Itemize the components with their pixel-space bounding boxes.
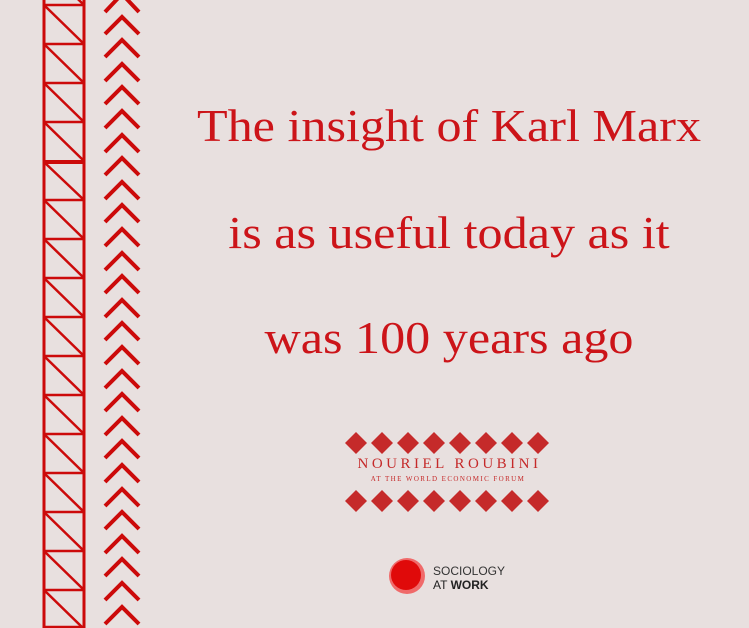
icon: red circle: [389, 558, 425, 594]
ladder: [44, 0, 84, 628]
logo: Sociology at Work: AT WORK: [433, 578, 489, 592]
logo: Sociology at Work: [389, 558, 505, 594]
quote text: was 100 years ago: [265, 312, 633, 363]
chevrons: [105, 0, 139, 624]
attribution block: [345, 432, 549, 512]
attribution block: AT THE WORLD ECONOMIC FORUM: [371, 475, 525, 483]
attribution block: NOURIEL ROUBINI: [357, 456, 542, 472]
quote text: is as useful today as it: [228, 207, 670, 258]
logo: Sociology at Work: SOCIOLOGY: [433, 564, 505, 578]
quote text: The insight of Karl Marx: [197, 100, 701, 151]
quote text: [197, 100, 701, 363]
decoration: ladder and chevrons: [42, 0, 140, 628]
